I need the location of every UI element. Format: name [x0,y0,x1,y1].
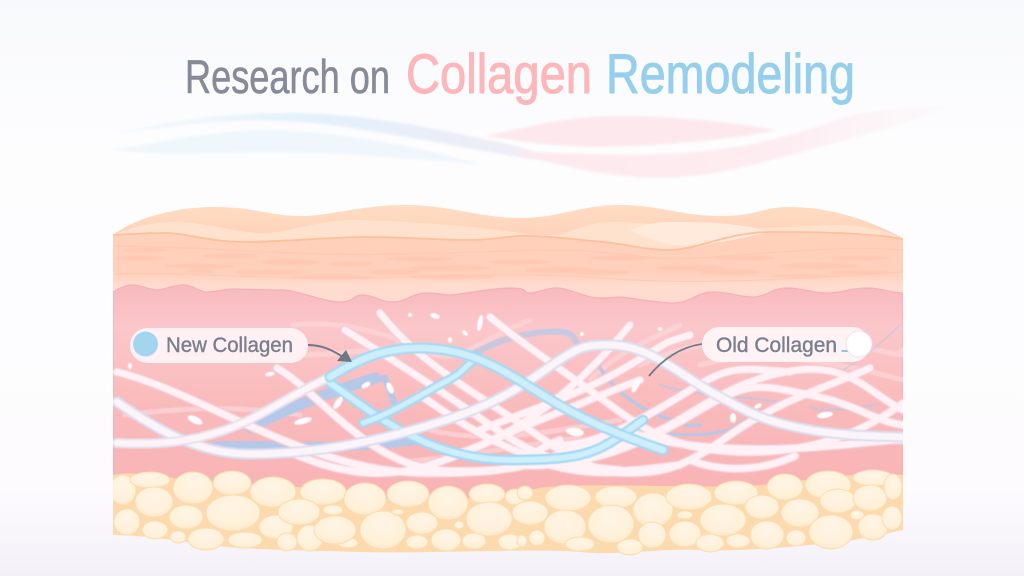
collagen particles [128,312,833,437]
white old collagen fibres [117,313,903,473]
title: Collagen: Collagen [406,42,592,105]
layer: fat [110,470,903,555]
label: New Collagen [130,328,352,363]
title: Research on: Research on [185,50,390,103]
main blue arc [330,348,663,450]
layer: dermis [113,285,903,505]
icon: blue dot [133,332,158,356]
label: Old Collagen [649,327,872,376]
pill [702,327,870,362]
label text: New Collagen [166,334,293,357]
epidermis cells [172,260,884,280]
title [185,42,855,105]
faint dermis fibres [125,320,903,462]
decorative swoosh under title [100,104,955,178]
epidermis top sheets [113,220,903,250]
epidermis strata [115,246,903,281]
blue wave lower [330,383,643,460]
pill [130,328,308,363]
fat backing [113,473,903,553]
swoosh: pink lower [510,104,955,178]
swoosh: blue [100,113,575,165]
stratum line [113,232,903,250]
icon: white dot [841,331,872,357]
title: Remodeling: Remodeling [606,42,855,105]
blue strand rising [363,357,478,423]
skin cross-section [110,205,903,555]
swoosh: pale blue [110,130,483,165]
new collagen fibres (blue) [117,345,903,460]
label text: Old Collagen [716,334,837,357]
pale strand left [117,377,330,444]
pointer line to old collagen [649,344,702,376]
long lavender strand [117,345,903,454]
arrow to new collagen [308,345,352,362]
layer: epidermis [113,205,903,310]
fat cells [110,470,902,555]
light patch [630,222,770,245]
blue-grey fibre shadows [215,325,900,446]
swoosh: pink upper [485,116,777,147]
